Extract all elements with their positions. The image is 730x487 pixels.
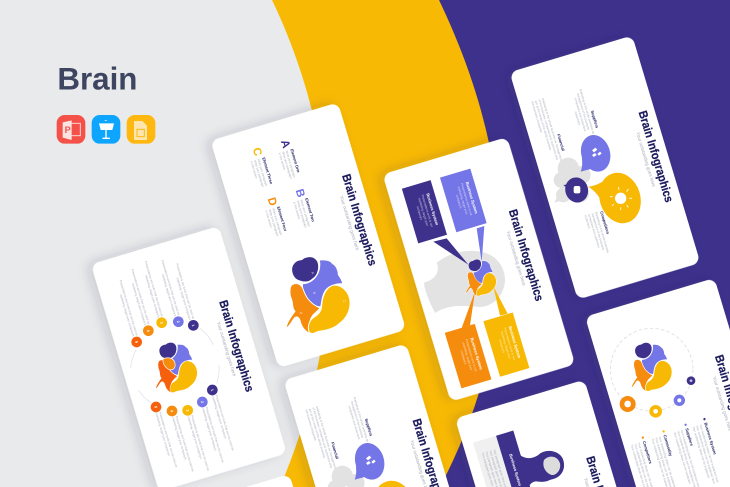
card text: Brain Infographics xyxy=(339,172,380,268)
background: yellow arc band xyxy=(272,0,730,487)
card text: Financial xyxy=(330,441,340,459)
card text xyxy=(304,378,450,487)
card text: marketing, target your company's xyxy=(211,396,228,440)
panel: card with dashed ring and list xyxy=(585,278,730,487)
card text: Write your paragraph xyxy=(257,158,269,187)
card text: A xyxy=(278,139,292,150)
card text: Element One xyxy=(289,148,301,174)
card text: Presentations are tools that can be used as xyxy=(130,268,151,325)
numbered markers lower: 5 xyxy=(153,406,158,409)
brain lobe letters: B xyxy=(312,291,317,295)
card text and boxes: Business System xyxy=(508,453,523,487)
card text: marketing, target your company's xyxy=(144,274,161,318)
callout: dark: marketing, target your xyxy=(417,197,430,226)
bubbles and gray brain xyxy=(328,439,421,487)
card text: Element Two xyxy=(304,197,316,223)
card text and list xyxy=(612,353,730,487)
callout: dark: company's xyxy=(416,206,424,221)
card text and list: Suppliers xyxy=(684,428,695,447)
card text: in this section xyxy=(250,161,259,179)
callout tails xyxy=(433,226,508,328)
circular arrows xyxy=(131,328,219,403)
icon: PowerPoint: P xyxy=(65,125,71,135)
panel: card with four callout boxes xyxy=(383,137,575,402)
numbered markers upper: 2 xyxy=(176,320,180,323)
card text: marketing, target your company's xyxy=(171,417,188,461)
bubble: yellow xyxy=(588,168,647,228)
card text: Presentations are tools that can be used as xyxy=(160,259,181,316)
card text xyxy=(112,241,275,481)
card text and list: Competitors xyxy=(642,440,653,465)
card text: companies and customers xyxy=(573,97,587,132)
icon: Google Slides xyxy=(127,115,155,144)
card text: Brain Infographics xyxy=(636,109,676,204)
card text: marketing, target your company's xyxy=(131,282,147,326)
card text: Your outstanding goes here xyxy=(216,321,237,377)
card text: marketing, target your company's xyxy=(201,408,218,452)
card text: marketing, target your company's xyxy=(187,416,203,460)
card text: companies and customers xyxy=(587,214,601,249)
card text: Write your paragraph xyxy=(299,199,311,228)
card text: Presentations are tools that can be used as xyxy=(144,261,164,317)
card text: Your outstanding goes here xyxy=(635,132,657,188)
card text: in this section xyxy=(292,201,301,220)
numbered markers upper: 1 xyxy=(191,324,195,327)
card text: C xyxy=(250,146,264,158)
callout: orange xyxy=(445,324,491,388)
brain lobe letters: A xyxy=(310,271,315,275)
card text: Marketing is the whole business xyxy=(594,211,610,254)
callout: dark: Presentations work is not xyxy=(421,194,434,228)
callout: indigo xyxy=(440,169,487,232)
numbered markers lower: 4 xyxy=(169,410,174,414)
card text: the business companies xyxy=(304,409,318,442)
card text: Financial xyxy=(556,133,566,151)
card text: Presentations are tools that can be used as xyxy=(215,395,235,451)
card text: of the business, companies and customers who xyxy=(537,99,559,161)
card text: in this section xyxy=(278,152,287,171)
card text: Your outstanding goes here xyxy=(339,195,360,251)
card text: Presentations are tools that can be used as xyxy=(158,411,179,468)
card text: Write your paragraph xyxy=(281,151,293,179)
callout: orange: marketing, target your xyxy=(461,342,474,371)
card text: Your outstanding goes here xyxy=(506,230,527,286)
card text: marketing, target your company's xyxy=(119,293,136,338)
callout: indigo: Business System xyxy=(465,181,479,215)
brain diagram xyxy=(466,259,496,296)
card text and list: Your outstanding ideas can be explained xyxy=(691,426,711,479)
callout: orange: Business System xyxy=(469,337,484,371)
card text: Write your paragraph xyxy=(271,208,283,236)
gray head silhouette xyxy=(424,251,505,313)
callout: orange: company's xyxy=(460,350,468,365)
card text: Write your paragraph xyxy=(285,150,297,178)
numbered markers upper: 4 xyxy=(146,329,150,333)
card text: Write your paragraph xyxy=(268,209,280,237)
card text: the business companies xyxy=(530,101,544,134)
card text xyxy=(530,70,685,262)
bubble: indigo xyxy=(577,131,615,175)
card text: are at the center of the whole business xyxy=(534,100,553,151)
card text: Element Three xyxy=(261,157,274,185)
callout: orange: Presentations work is not xyxy=(465,339,478,372)
card text: companies and customers xyxy=(347,405,361,440)
card text: in this section xyxy=(264,210,273,229)
brain lobe letters: D xyxy=(299,311,303,315)
card text: B xyxy=(293,188,307,199)
numbered markers lower xyxy=(151,385,218,416)
bubble: navy xyxy=(562,175,591,205)
card text: Marketing is the whole business as management xyxy=(541,98,563,161)
heading: Brain: Brain xyxy=(57,61,137,96)
card text: Presentations are tools that can be used as xyxy=(205,407,225,463)
card text: Presentations are tools that can be used as xyxy=(175,263,196,320)
card text and list: Commodity xyxy=(662,434,674,457)
card text: Write your paragraph xyxy=(296,200,308,229)
card text and list: Your outstanding ideas can be explained here xyxy=(680,429,701,487)
card text: marketing, target your company's xyxy=(175,277,192,321)
callout boxes xyxy=(402,168,530,388)
brain diagram xyxy=(631,342,672,392)
card text: Marketing is the whole business as xyxy=(579,89,596,135)
card text: marketing, target your company's xyxy=(155,413,171,457)
callout: yellow xyxy=(483,312,529,377)
card text: Suppliers xyxy=(364,418,374,437)
card text: customers xyxy=(584,215,592,229)
numbered markers upper: 3 xyxy=(159,321,164,324)
card text xyxy=(246,123,380,291)
card text: Presentations are tools that can be used as xyxy=(175,416,195,472)
numbered markers upper xyxy=(131,316,199,347)
card text: Marketing is the whole business as management xyxy=(315,406,337,469)
brain lobe letters xyxy=(299,271,347,315)
callout: dark: Business System xyxy=(425,193,440,226)
card text: management of the business xyxy=(350,400,365,439)
callout: dark xyxy=(402,180,447,243)
head silhouette with brain xyxy=(520,451,564,487)
card text: management of the business xyxy=(576,92,591,131)
card text: Element Four xyxy=(276,206,288,232)
brain diagram xyxy=(286,257,350,334)
card text and list: Your outstanding ideas can be explained here xyxy=(698,424,720,483)
card text and list: Business System xyxy=(703,422,718,455)
numbered markers lower: 2 xyxy=(200,401,204,404)
card text: Marketing is the whole business as xyxy=(353,397,370,443)
card text: Write your paragraph xyxy=(253,159,265,188)
card text: marketing, target your company's xyxy=(161,273,177,317)
panel: bottom card with head profile xyxy=(455,380,653,487)
card text: Competitors xyxy=(599,211,611,235)
callout: yellow: Presentations work is not xyxy=(503,327,516,360)
gray brain xyxy=(554,158,591,203)
card text: Brain Infographics xyxy=(506,208,547,303)
brain diagram xyxy=(155,342,197,393)
numbered markers upper: 5 xyxy=(134,341,139,344)
brain lobe letters: C xyxy=(342,300,347,304)
card text: D xyxy=(265,196,279,207)
background: purple arc band xyxy=(439,0,730,487)
panel: card with speech bubbles xyxy=(510,35,700,300)
dashed ring xyxy=(610,328,693,411)
card text: are at the center of the whole business xyxy=(308,408,327,459)
callout: yellow: Business System xyxy=(508,326,522,359)
callout: indigo: Presentations work is not xyxy=(460,183,473,216)
card text and boxes xyxy=(473,410,624,487)
panel: lower card with speech bubbles xyxy=(284,343,474,487)
ring markers xyxy=(620,376,695,418)
card text: Presentations are tools that can be used as xyxy=(119,280,139,336)
card text: of the business, companies and customers who xyxy=(311,407,333,469)
callout: yellow: marketing, target your xyxy=(500,330,512,359)
card text: Brain Infographics xyxy=(216,298,257,394)
icon row: presentation apps xyxy=(57,115,155,144)
card text: Suppliers xyxy=(590,110,600,129)
panel: partially visible bottom card xyxy=(160,474,358,487)
callout: yellow: company's xyxy=(498,339,506,354)
card text: management of the business xyxy=(591,212,606,251)
card text and list: Your outstanding ideas can be explained here xyxy=(695,425,716,484)
card text: customers xyxy=(574,111,582,126)
panel: card with numbered circle xyxy=(91,226,287,487)
numbered markers lower: 1 xyxy=(210,389,214,392)
callout: indigo: company's xyxy=(455,194,463,209)
callout: indigo: marketing, target your xyxy=(457,186,469,215)
card text: Presentations are tools that can be used as xyxy=(190,415,211,472)
panel: card with lettered elements xyxy=(210,102,406,368)
card text and list: Your outstanding ideas can be explained xyxy=(673,431,692,484)
icon: Keynote xyxy=(92,115,120,144)
numbered markers lower: 3 xyxy=(185,409,190,412)
